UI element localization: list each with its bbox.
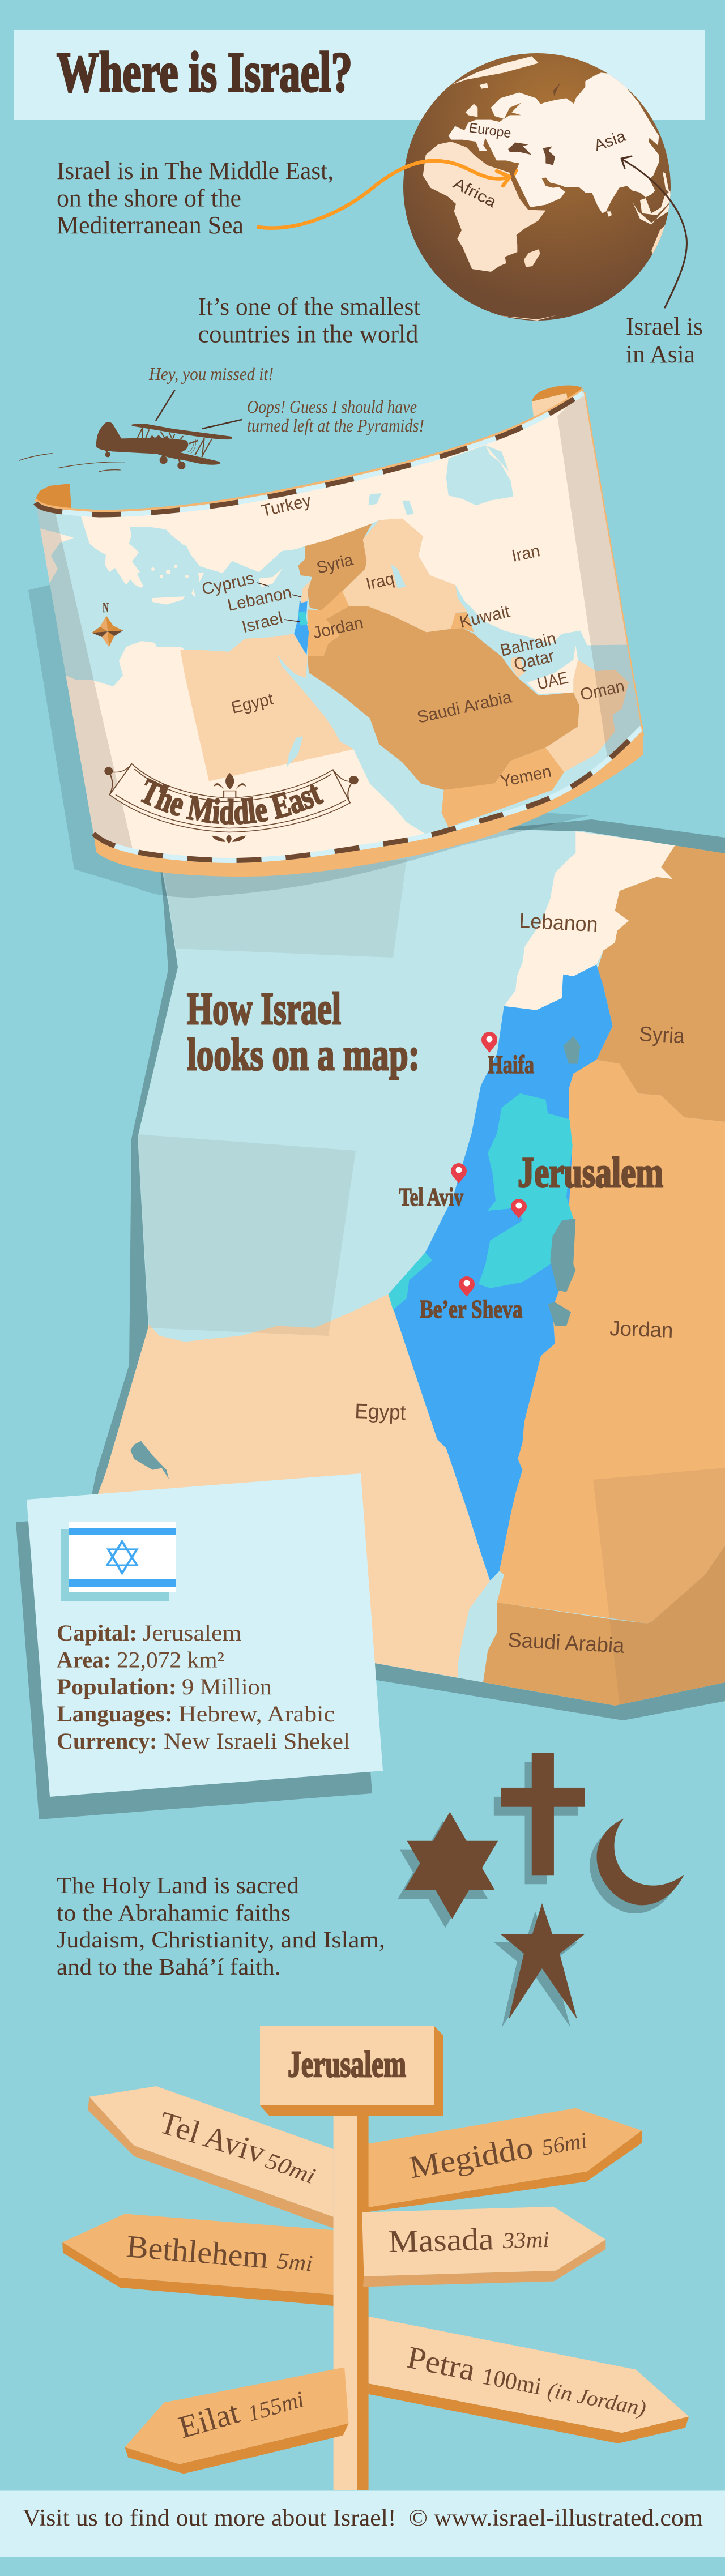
land: Aegean islands bbox=[151, 565, 204, 597]
facts list bbox=[57, 1620, 350, 1754]
map area: Lebanon bbox=[504, 831, 675, 1010]
sign label: Megiddo: Megiddo bbox=[407, 2130, 536, 2185]
sign label: Tel Aviv bbox=[155, 2105, 319, 2189]
plane speech: Oops bbox=[202, 396, 424, 435]
sign label: Megiddo bbox=[407, 2128, 588, 2185]
facts list: Jerusalem bbox=[143, 1620, 241, 1646]
map area: Syria bbox=[596, 845, 725, 1123]
scroll labels: Oman bbox=[579, 677, 626, 704]
sign label: Masada bbox=[388, 2222, 549, 2259]
icon: compass rose bbox=[92, 600, 123, 647]
icon: cross bbox=[494, 1753, 585, 1884]
globe label: Asia: Asia bbox=[591, 127, 628, 155]
arrow sign: Bethlehem bbox=[62, 2214, 334, 2306]
facts list: Area: bbox=[57, 1647, 111, 1673]
globe label: Europe: Europe bbox=[468, 120, 512, 141]
large map page shadow bbox=[85, 819, 725, 1720]
scroll right edge line bbox=[585, 392, 643, 736]
arrow to Israel bbox=[258, 161, 517, 228]
text: one of the smallest countries bbox=[198, 293, 420, 348]
icon: Israeli flag bbox=[61, 1522, 176, 1601]
text: Israel is in the Middle East: on the shore of the bbox=[57, 185, 241, 212]
plane speech: Oops: Oops! Guess I should have bbox=[247, 396, 417, 417]
sign label: Masada: Masada bbox=[388, 2222, 494, 2259]
sign label: Petra: Petra bbox=[404, 2340, 478, 2388]
scroll bottom edge bbox=[93, 728, 642, 861]
sign label: Megiddo: 56mi bbox=[540, 2128, 588, 2160]
text: Israel is in Asia: in Asia bbox=[626, 340, 695, 368]
map fold shading bbox=[138, 859, 725, 1706]
sign label: Masada: 33mi bbox=[502, 2227, 549, 2253]
land: Turkey and Iran bbox=[165, 392, 627, 646]
scroll labels: Cyprus bbox=[200, 569, 256, 599]
scroll labels: Iraq bbox=[364, 569, 396, 594]
scroll labels: Syria bbox=[315, 550, 355, 578]
sign label: Bethlehem: Bethlehem bbox=[125, 2229, 270, 2275]
scroll labels: Egypt bbox=[229, 690, 275, 717]
info card bbox=[16, 1473, 383, 1819]
scroll labels: Israel bbox=[240, 609, 285, 636]
scroll labels: Jordan bbox=[311, 613, 365, 643]
large map of Israel bbox=[79, 815, 725, 1721]
map area: Jordan bbox=[497, 1060, 725, 1624]
scroll shadow bbox=[28, 583, 589, 898]
text: Israel is in Asia bbox=[626, 313, 703, 368]
heading: How Israel looks on a map: looks on a map: bbox=[187, 1030, 420, 1080]
city pin: Be'er Sheva: Be’er Sheva bbox=[420, 1295, 522, 1323]
land: Italy bbox=[40, 529, 74, 583]
water: Caspian Sea bbox=[446, 445, 513, 506]
map area: lakes bbox=[548, 1036, 580, 1326]
arrow sign: Petra bbox=[369, 2317, 689, 2443]
land: Balkans and Greece bbox=[81, 516, 232, 588]
scroll bottom band bbox=[93, 725, 643, 877]
city pin: Jerusalem: Jerusalem bbox=[518, 1149, 663, 1197]
text: one of the smallest countries: countries in the world bbox=[198, 321, 418, 348]
text: Israel is in the Middle East bbox=[57, 157, 334, 239]
facts list: Capital: bbox=[57, 1620, 137, 1646]
title: Where is Israel? bbox=[57, 40, 352, 104]
text: Israel is in the Middle East: Mediterranean Sea bbox=[57, 211, 244, 239]
arrow sign: Tel Aviv bbox=[88, 2086, 334, 2228]
sign label: Tel Aviv: Tel Aviv bbox=[155, 2105, 269, 2171]
scroll labels: Turkey bbox=[259, 491, 313, 520]
sign label: Tel Aviv: 50mi bbox=[262, 2147, 319, 2189]
map area: Lake Qarun bbox=[130, 1441, 169, 1479]
map area: Gulf of Aqaba bbox=[458, 1571, 504, 1682]
footer text: Visit us to find out more about Israel! © www.israel-illustrated.com bbox=[23, 2505, 703, 2531]
scroll labels: Kuwait bbox=[458, 602, 512, 632]
facts list: 22,072 km² bbox=[117, 1647, 224, 1673]
map area: Israel bbox=[389, 964, 613, 1580]
sign label: Petra bbox=[404, 2340, 648, 2421]
top sign: Jerusalem: Jerusalem bbox=[288, 2044, 406, 2085]
text: Holy Land: Judaism, Christianity, and Islam, bbox=[57, 1926, 385, 1953]
banner: The Middle East: The Middle East bbox=[140, 778, 324, 825]
city pin: Jerusalem bbox=[511, 1149, 663, 1219]
scroll map: The Middle East bbox=[33, 385, 645, 877]
banner: The Middle East bbox=[104, 763, 359, 844]
sign label: Petra: 100mi bbox=[480, 2364, 544, 2400]
plane speech: Hey, you missed it bbox=[148, 364, 274, 421]
scroll roll: top right bbox=[532, 385, 582, 422]
map area: Saudi Arabia bbox=[483, 1546, 725, 1706]
city pin: Tel Aviv bbox=[399, 1163, 467, 1211]
heading: How Israel looks on a map bbox=[187, 984, 420, 1080]
map label: Syria: Syria bbox=[639, 1022, 685, 1048]
map area: West Bank and Gaza bbox=[389, 1093, 573, 1310]
land: North Africa bbox=[66, 641, 425, 858]
scroll labels: UAE bbox=[535, 668, 570, 694]
facts list: 9 Million bbox=[182, 1674, 272, 1699]
plane speech: Hey, you missed it: Hey, you missed it! bbox=[148, 364, 274, 384]
scroll roll: top left bbox=[36, 484, 71, 509]
scroll labels: Bahrain bbox=[498, 629, 558, 660]
city pin: Tel Aviv: Tel Aviv bbox=[399, 1182, 463, 1211]
signpost bbox=[62, 2026, 689, 2490]
text: Holy Land bbox=[57, 1872, 385, 1980]
map area: Egypt bbox=[88, 1294, 490, 1677]
scroll top edge bbox=[36, 390, 583, 515]
arrow sign: Eilat bbox=[125, 2367, 348, 2474]
scroll sheet bbox=[36, 392, 641, 858]
scroll labels bbox=[200, 491, 626, 791]
map label: Lebanon: Lebanon bbox=[519, 909, 599, 936]
arrow sign: Megiddo bbox=[368, 2108, 642, 2212]
sign label: Eilat bbox=[174, 2386, 307, 2445]
text: one of the smallest countries: It’s one of the smallest bbox=[198, 293, 420, 321]
facts list: New Israeli Shekel bbox=[164, 1728, 350, 1754]
sign label: Bethlehem: 5mi bbox=[276, 2248, 314, 2276]
text: Holy Land: The Holy Land is sacred bbox=[57, 1872, 299, 1898]
sign label: Eilat: 155mi bbox=[245, 2386, 307, 2427]
facts list: Hebrew, Arabic bbox=[178, 1701, 335, 1727]
text: Holy Land: and to the Bahá’í faith. bbox=[57, 1954, 280, 1980]
arrow sign: Masada bbox=[362, 2207, 605, 2287]
icon: compass rose: N bbox=[103, 600, 109, 616]
text: Israel is in the Middle East: Israel is in The Middle East, bbox=[57, 157, 334, 185]
top sign: Jerusalem bbox=[260, 2026, 443, 2116]
footer bar bbox=[0, 2490, 725, 2557]
icon: star of David bbox=[398, 1812, 498, 1928]
globe bbox=[403, 53, 671, 321]
scroll labels: Qatar bbox=[512, 647, 556, 674]
facts list: Currency: bbox=[57, 1728, 157, 1754]
countries of the Middle East bbox=[152, 445, 629, 827]
scroll labels: Iran bbox=[510, 541, 541, 566]
icon: biplane bbox=[19, 422, 232, 472]
arrow to Asia bbox=[621, 156, 687, 307]
scroll labels: Yemen bbox=[499, 762, 553, 791]
city pin: Haifa bbox=[481, 1032, 534, 1079]
plane speech: Oops: turned left at the Pyramids! bbox=[247, 415, 424, 435]
sign label: Eilat: Eilat bbox=[174, 2395, 244, 2445]
map label: Jordan: Jordan bbox=[609, 1317, 673, 1342]
scroll labels: Saudi Arabia bbox=[415, 687, 514, 727]
globe label: Africa: Africa bbox=[450, 174, 500, 211]
scroll edge shading bbox=[28, 385, 651, 866]
city pin: Haifa: Haifa bbox=[488, 1050, 534, 1079]
map label: Saudi Arabia: Saudi Arabia bbox=[508, 1628, 625, 1657]
facts list: Languages: bbox=[57, 1701, 172, 1727]
icon: five-pointed star bbox=[493, 1903, 585, 2027]
heading: How Israel looks on a map: How Israel bbox=[187, 984, 341, 1034]
sign label: Petra: (in Jordan) bbox=[545, 2378, 648, 2421]
text: Israel is in Asia: Israel is bbox=[626, 313, 703, 340]
text: Holy Land: to the Abrahamic faiths bbox=[57, 1900, 291, 1926]
signpost pole bbox=[334, 2114, 369, 2490]
icon: crescent bbox=[590, 1818, 684, 1913]
title banner bbox=[14, 30, 705, 120]
facts list: Population: bbox=[57, 1674, 177, 1699]
scroll labels: Lebanon bbox=[226, 583, 293, 615]
map label: Egypt: Egypt bbox=[355, 1399, 407, 1424]
city pin: Be'er Sheva bbox=[420, 1276, 522, 1323]
